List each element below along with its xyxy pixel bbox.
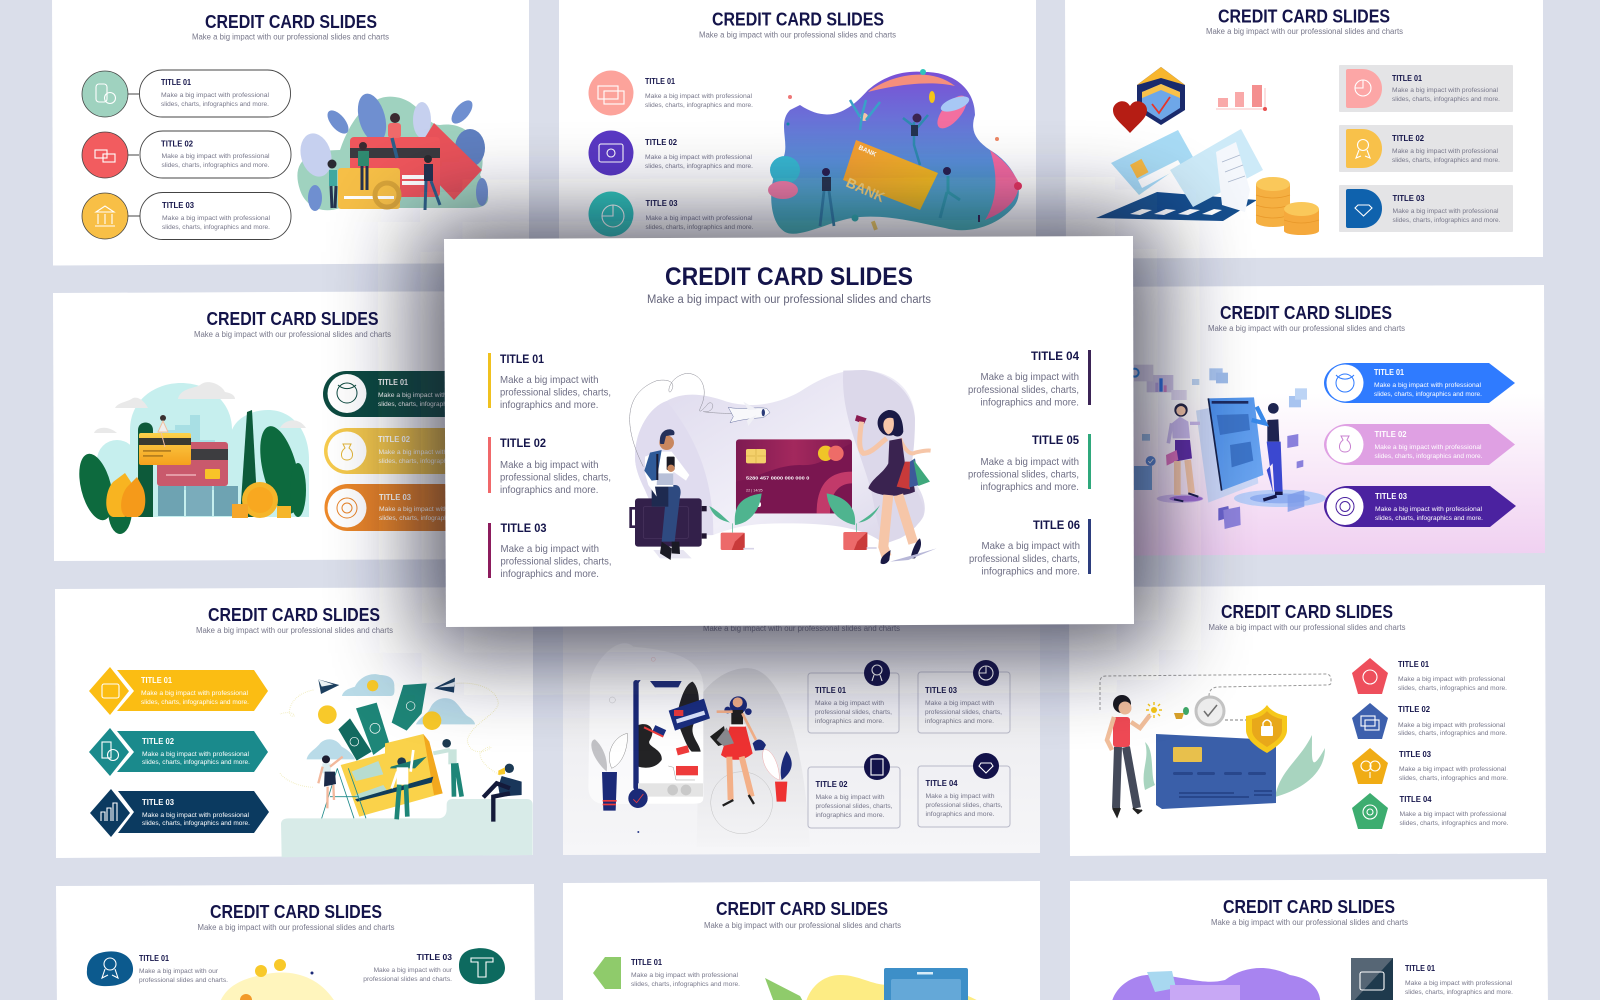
panel: slide row three center <box>563 586 1040 855</box>
item 3: Make a big impact with professional <box>162 215 271 222</box>
item 3: slides, charts, infographics and more. <box>1392 217 1501 224</box>
item 4: Make a big impact with professional <box>1400 811 1507 818</box>
item 3: Make a big impact with professional <box>142 812 250 819</box>
subheading: Make a big impact with our professional slides and charts <box>1208 324 1405 333</box>
item: title 02: professional slides, charts, <box>500 472 611 484</box>
item 3: Make a big impact with professional <box>379 506 487 513</box>
card: title 01: Make a big impact with <box>815 700 884 707</box>
item 2 <box>82 131 291 178</box>
item 1: TITLE 01 <box>645 76 675 86</box>
illustration: shopping woman and phone <box>588 643 810 847</box>
item 1 <box>1339 65 1513 112</box>
card: title 01: infographics and more. <box>815 718 884 725</box>
item 2: Make a big impact with professional <box>645 154 753 161</box>
item: title 06: TITLE 06 <box>1033 518 1080 532</box>
item 3: Make a big impact with professional <box>1375 506 1483 513</box>
item 1: TITLE 01 <box>1374 367 1404 377</box>
item 1: slides, charts, infographics and more. <box>1398 685 1507 692</box>
item 2 <box>1352 703 1507 739</box>
item: title 02 <box>488 436 611 496</box>
illustration: yellow blob and tablet <box>765 968 985 1000</box>
item: title 01: infographics and more. <box>500 399 598 411</box>
item 3: slides, charts, infographics and more. <box>1375 515 1483 522</box>
card: title 01: professional slides, charts, <box>815 709 892 716</box>
subheading: Make a big impact with our professional slides and charts <box>1208 623 1406 632</box>
card: title 02: professional slides, charts, <box>816 803 893 810</box>
item 1: TITLE 01 <box>378 377 408 387</box>
item: title 02: TITLE 02 <box>500 436 546 450</box>
item: title 03: Make a big impact with <box>500 543 599 555</box>
heading: CREDIT CARD SLIDES <box>665 263 913 291</box>
item 2: TITLE 02 <box>1398 704 1430 714</box>
item: title 06 <box>969 518 1091 578</box>
panel: slide bottom left <box>56 884 535 1000</box>
card: title 02 <box>808 754 900 828</box>
illustration: coins on pale shape <box>219 959 337 1000</box>
item: title 03: TITLE 03 <box>417 952 452 962</box>
heading: CREDIT CARD SLIDES <box>1220 302 1392 323</box>
item: title 01: professional slides and charts. <box>139 977 228 984</box>
panel: slide middle right <box>1066 285 1545 556</box>
item 3 <box>324 484 544 531</box>
item 2: TITLE 02 <box>378 434 410 444</box>
illustration: people on credit cards <box>296 90 488 211</box>
item: title 05 <box>968 433 1091 493</box>
heading: CREDIT CARD SLIDES <box>206 308 378 329</box>
illustration: shield, heart and chart <box>1096 67 1319 235</box>
item 1: TITLE 01 <box>161 77 191 87</box>
item: title 06: professional slides, charts, <box>969 553 1080 565</box>
item: title 04: professional slides, charts, <box>968 384 1079 396</box>
item: title 03: Make a big impact with our <box>374 967 453 974</box>
item 2: slides, charts, infographics and more. <box>1392 157 1500 164</box>
illustration: wallet with money and people <box>280 674 533 857</box>
item 1: TITLE 01 <box>141 675 172 685</box>
item: title 01 <box>593 957 740 989</box>
item 2: TITLE 02 <box>1374 429 1407 439</box>
item 2: Make a big impact with professional <box>1392 148 1499 155</box>
item 3: slides, charts, infographics and more. <box>1399 775 1508 782</box>
card: title 03: Make a big impact with <box>925 700 994 707</box>
item 1: slides, charts, infographics and more. <box>378 401 486 408</box>
illustration: two people with large phone <box>1131 365 1326 529</box>
item: title 04: Make a big impact with <box>980 371 1079 383</box>
item 2: TITLE 02 <box>161 138 193 148</box>
item 3: slides, charts, infographics and more. <box>646 224 754 231</box>
item 1: Make a big impact with professional <box>141 690 249 697</box>
item 1: Make a big impact with professional <box>378 392 486 399</box>
item 2 <box>89 728 268 776</box>
item 3: TITLE 03 <box>1399 749 1431 759</box>
item 2: Make a big impact with professional <box>162 153 270 160</box>
item: title 01: TITLE 01 <box>631 957 662 967</box>
item: title 03: TITLE 03 <box>500 521 547 535</box>
illustration: traveller, credit card and shopper: 5280 457 0000 000 000 0 <box>746 476 810 482</box>
card: title 01: TITLE 01 <box>815 685 846 695</box>
subheading: Make a big impact with our professional slides and charts <box>196 626 393 635</box>
item 1 <box>1352 658 1507 694</box>
subheading: Make a big impact with our professional slides and charts <box>198 923 394 932</box>
illustration: city and cards <box>73 382 309 534</box>
panel: slide top right <box>1065 0 1543 258</box>
item 3: slides, charts, infographics and more. <box>379 515 487 522</box>
heading: CREDIT CARD SLIDES <box>210 901 382 922</box>
subheading: Make a big impact with our professional slides and charts <box>1211 918 1408 927</box>
heading: CREDIT CARD SLIDES <box>712 8 884 30</box>
subheading: Make a big impact with our professional slides and charts <box>194 330 391 339</box>
item 3: TITLE 03 <box>379 492 411 502</box>
item 2: slides, charts, infographics and more. <box>142 759 250 766</box>
item: title 01: Make a big impact with our <box>139 968 219 975</box>
item: title 01 <box>488 352 611 411</box>
item: title 06: Make a big impact with <box>982 540 1080 552</box>
item 3 <box>1352 748 1508 784</box>
illustration: purple blob <box>1111 968 1320 1000</box>
card: title 03: TITLE 03 <box>925 685 957 695</box>
item 2 <box>1339 125 1513 172</box>
shadow: center slide <box>420 219 1159 653</box>
subheading: Make a big impact with our professional slides and charts <box>1206 27 1403 36</box>
card: title 04: TITLE 04 <box>926 778 958 788</box>
card: title 04: professional slides, charts, <box>926 802 1003 809</box>
item 2: TITLE 02 <box>1392 133 1424 143</box>
item 2 <box>1324 424 1515 465</box>
heading: CREDIT CARD SLIDES <box>205 11 377 32</box>
item 2: slides, charts, infographics and more. <box>1398 730 1507 737</box>
illustration: traveller, credit card and shopper <box>630 370 937 564</box>
item: title 03 <box>488 521 612 580</box>
heading: CREDIT CARD SLIDES <box>1218 6 1390 26</box>
item 3 <box>90 789 269 837</box>
item 2: TITLE 02 <box>142 736 174 746</box>
item 4: slides, charts, infographics and more. <box>1400 820 1509 827</box>
card: title 03 <box>918 660 1010 733</box>
item 2: TITLE 02 <box>645 137 677 147</box>
illustration: woman with secure credit card <box>1100 674 1331 816</box>
item 3: Make a big impact with professional <box>646 215 753 222</box>
item 1: slides, charts, infographics and more. <box>141 699 249 706</box>
card: title 02: Make a big impact with <box>816 794 885 801</box>
item 3: TITLE 03 <box>646 198 678 208</box>
item 3: slides, charts, infographics and more. <box>142 820 250 827</box>
subheading: Make a big impact with our professional slides and charts <box>699 30 896 40</box>
item: title 05: TITLE 05 <box>1032 433 1079 447</box>
item 2 <box>324 428 544 474</box>
item 1: Make a big impact with professional <box>1392 87 1499 94</box>
panel: slide row three left <box>55 587 533 858</box>
item: title 03: infographics and more. <box>500 568 599 580</box>
card: title 01 <box>808 660 899 733</box>
item 3 <box>1339 185 1513 232</box>
subheading: Make a big impact with our professional slides and charts <box>647 294 931 306</box>
item 2: Make a big impact with professional <box>142 751 250 758</box>
card: title 02: infographics and more. <box>816 812 885 819</box>
card: title 04: infographics and more. <box>926 811 995 818</box>
card: title 04 <box>918 753 1010 827</box>
item 2 <box>588 130 753 176</box>
item 1 <box>588 70 753 116</box>
item: title 05: professional slides, charts, <box>968 468 1079 480</box>
item 1: Make a big impact with professional <box>1398 676 1506 683</box>
item 1: slides, charts, infographics and more. <box>1374 391 1482 398</box>
panel: slide top left <box>52 0 529 266</box>
item 3: slides, charts, infographics and more. <box>162 224 270 231</box>
item 1 <box>89 667 268 715</box>
item: title 04 <box>968 349 1091 408</box>
illustration: bank card on gradient blob: BANK <box>844 174 887 205</box>
card: title 03: professional slides, charts, <box>925 709 1002 716</box>
item 2: Make a big impact with professional <box>1374 444 1482 451</box>
panel: slide middle left <box>53 291 544 561</box>
heading: CREDIT CARD SLIDES <box>1223 896 1395 917</box>
item: title 01: professional slides, charts, <box>500 386 611 398</box>
item: title 01: TITLE 01 <box>1405 963 1435 973</box>
item 3 <box>82 192 291 240</box>
item 3 <box>588 192 754 236</box>
item 1 <box>82 70 290 117</box>
item 2: Make a big impact with professional <box>1398 722 1506 729</box>
item 3: TITLE 03 <box>142 797 174 807</box>
item 1: Make a big impact with professional <box>1374 382 1482 389</box>
item 3 <box>1324 486 1516 527</box>
item: title 06: infographics and more. <box>982 566 1080 578</box>
item 1: slides, charts, infographics and more. <box>161 101 269 108</box>
item 2: slides, charts, infographics and more. <box>645 163 753 170</box>
item: title 01: slides, charts, infographics and more. <box>631 981 740 988</box>
panel: slide top center <box>559 0 1036 264</box>
item 3: TITLE 03 <box>1375 491 1407 501</box>
illustration: bank card on gradient blob <box>768 69 1022 234</box>
item 4 <box>1352 793 1509 829</box>
item: title 03: professional slides, charts, <box>500 556 612 568</box>
item: title 04: TITLE 04 <box>1031 349 1079 363</box>
item 3: TITLE 03 <box>162 200 194 210</box>
item 1 <box>323 371 543 417</box>
item 2: slides, charts, infographics and more. <box>162 162 270 169</box>
card: title 03: infographics and more. <box>925 718 994 725</box>
item: title 01 <box>87 951 228 986</box>
panel: slide bottom right <box>1070 879 1548 1000</box>
item 3: TITLE 03 <box>1392 193 1425 203</box>
item: title 05: Make a big impact with <box>980 456 1079 468</box>
item: title 01: TITLE 01 <box>139 953 169 963</box>
heading: CREDIT CARD SLIDES <box>716 898 888 919</box>
item: title 01: Make a big impact with professional <box>631 972 739 979</box>
subheading: Make a big impact with our professional slides and charts <box>703 624 900 633</box>
item: title 01: Make a big impact with professional <box>1405 980 1513 987</box>
item: title 02: infographics and more. <box>500 484 598 496</box>
card: title 04: Make a big impact with <box>926 793 995 800</box>
illustration: traveller, credit card and shopper: 22 | 14/25 <box>746 488 763 492</box>
item 1: Make a big impact with professional <box>161 92 270 99</box>
item: title 05: infographics and more. <box>980 481 1079 493</box>
item: title 02: Make a big impact with <box>500 459 599 471</box>
item: title 01: slides, charts, infographics and more. <box>1405 989 1513 996</box>
item 2: slides, charts, infographics and more. <box>1374 453 1483 460</box>
item 1 <box>1324 363 1515 403</box>
heading: CREDIT CARD SLIDES <box>1221 601 1393 622</box>
panel: slide row three right <box>1069 585 1546 856</box>
subheading: Make a big impact with our professional slides and charts <box>192 32 389 42</box>
item 1: TITLE 01 <box>1398 659 1429 669</box>
item 1: TITLE 01 <box>1392 73 1422 83</box>
item 2: Make a big impact with professional <box>378 449 486 456</box>
item: title 01: TITLE 01 <box>500 352 544 366</box>
subheading: Make a big impact with our professional slides and charts <box>704 921 901 930</box>
item: title 04: infographics and more. <box>980 396 1079 408</box>
heading: CREDIT CARD SLIDES <box>208 604 380 625</box>
item 1: slides, charts, infographics and more. <box>645 102 753 109</box>
item 4: TITLE 04 <box>1400 794 1432 804</box>
item: title 03 <box>363 948 505 984</box>
item 3: Make a big impact with professional <box>1399 766 1507 773</box>
panel: slide bottom center <box>563 881 1040 1000</box>
item 1: Make a big impact with professional <box>645 93 753 100</box>
item 1: slides, charts, infographics and more. <box>1392 96 1500 103</box>
item 3: Make a big impact with professional <box>1392 208 1499 215</box>
item 2: slides, charts, infographics and more. <box>378 458 487 465</box>
item: title 01: Make a big impact with <box>500 374 599 386</box>
card: title 02: TITLE 02 <box>816 779 848 789</box>
illustration: bank card on gradient blob: BANK <box>857 144 877 159</box>
item: title 01 <box>1351 958 1513 1000</box>
item: title 03: professional slides and charts. <box>363 976 452 983</box>
panel: featured center slide <box>444 236 1134 627</box>
